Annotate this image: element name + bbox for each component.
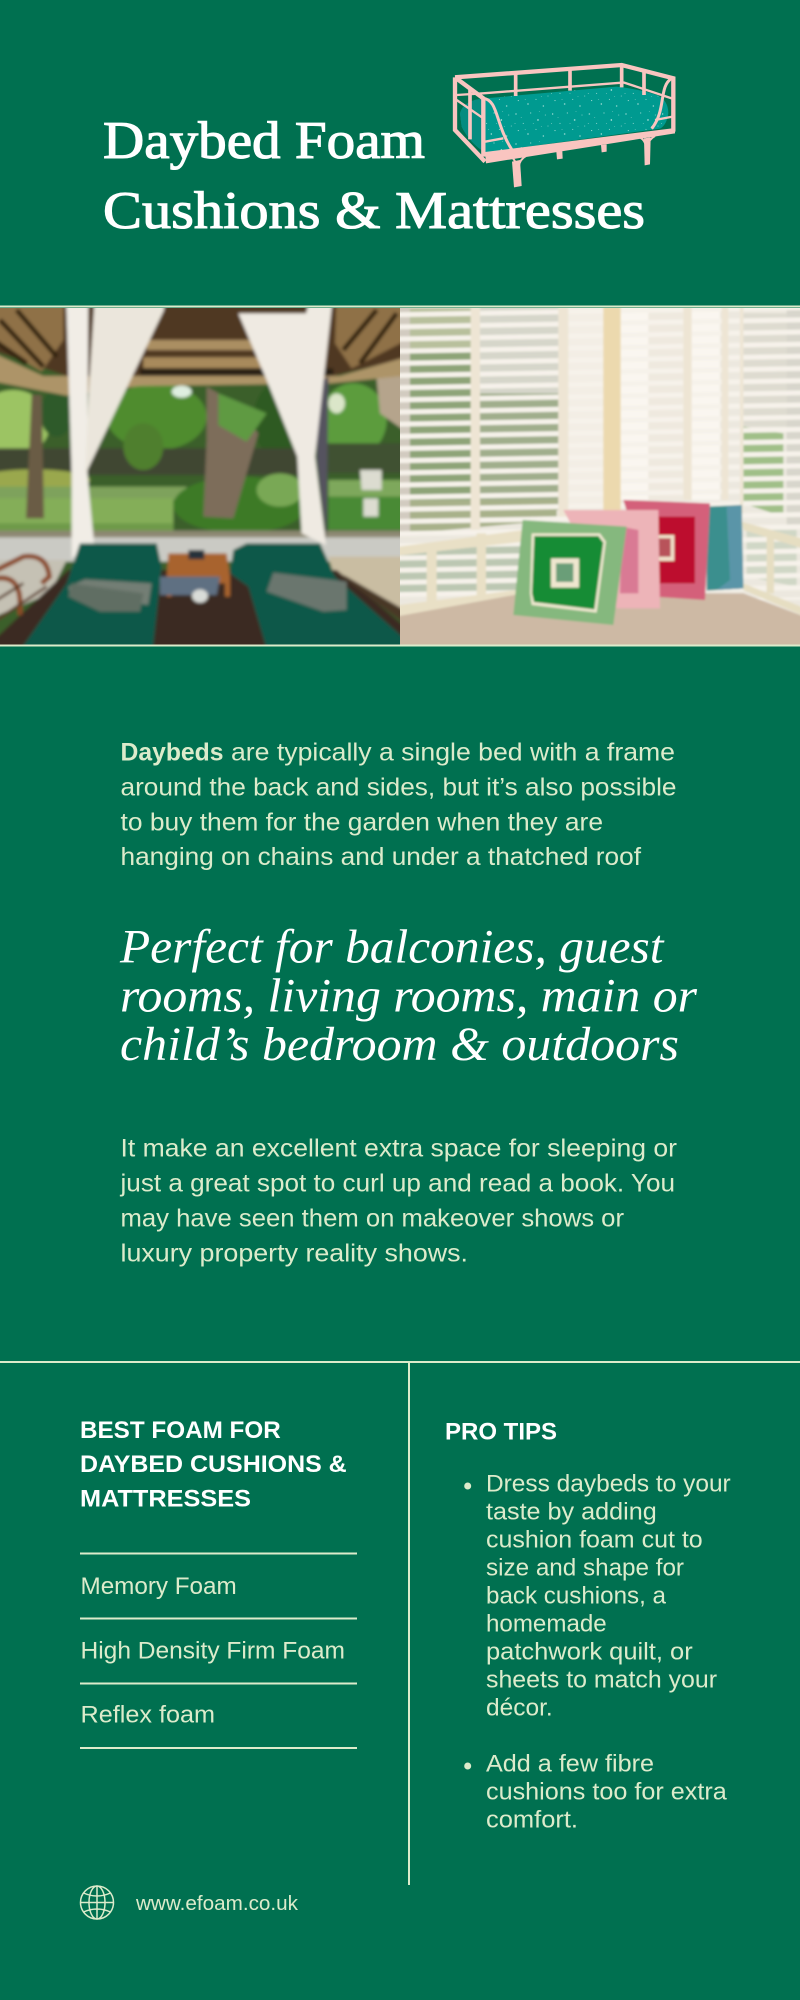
footer	[80, 1886, 299, 1919]
divider: below photos	[0, 644, 800, 646]
photo: garden daybed under thatched roof	[0, 308, 400, 644]
icon: daybed illustration	[455, 65, 675, 187]
title: Cushions & Mattresses	[103, 182, 645, 240]
teal cushion	[707, 505, 743, 591]
garden foliage	[0, 390, 50, 457]
tip 1: cushion foam cut to	[486, 1527, 703, 1554]
bench	[0, 556, 49, 620]
text block: intro: around the back and sides, but it’s also possible	[120, 773, 676, 801]
text block: intro: Daybeds	[120, 739, 224, 767]
title	[103, 112, 645, 240]
callout: perfect for: Perfect for balconies, guest	[119, 921, 665, 974]
text block: extra space: luxury property reality shows.	[120, 1240, 468, 1268]
tip 1: sheets to match your	[486, 1667, 717, 1694]
red cushion	[623, 500, 710, 600]
heading: best foam: DAYBED CUSHIONS &	[80, 1451, 347, 1478]
divider: section rule	[0, 1361, 800, 1363]
text block: intro	[120, 739, 676, 871]
text block: extra space: It make an excellent extra space for sleeping or	[120, 1135, 677, 1163]
tip 1: Dress daybeds to your	[486, 1471, 731, 1498]
foam list: High Density Firm Foam	[80, 1638, 345, 1665]
foam list: Memory Foam	[80, 1573, 237, 1600]
callout: perfect for	[119, 921, 697, 1071]
panel: pro tips	[445, 1418, 731, 1834]
panel: best foam	[80, 1417, 357, 1749]
heading: pro tips: PRO TIPS	[445, 1418, 557, 1445]
text block: intro: to buy them for the garden when they are	[120, 808, 603, 836]
table	[167, 553, 230, 583]
icon: globe	[80, 1886, 114, 1919]
text block: extra space	[119, 1135, 677, 1268]
foam list: Reflex foam	[80, 1701, 215, 1728]
callout: perfect for: child’s bedroom & outdoors	[120, 1018, 679, 1071]
heading: best foam: BEST FOAM FOR	[80, 1417, 281, 1444]
text block: extra space: just a great spot to curl up and read a book. You	[119, 1170, 675, 1198]
tip 1: décor.	[486, 1695, 553, 1722]
tip 1: homemade	[486, 1611, 607, 1638]
divider: top rule	[0, 306, 800, 308]
green cushions	[22, 541, 163, 644]
tip 2: comfort.	[486, 1807, 578, 1834]
heading: best foam	[80, 1417, 347, 1513]
roof	[0, 308, 400, 376]
tip 2: cushions too for extra	[486, 1779, 727, 1806]
divider: column rule	[408, 1362, 410, 1885]
tip 2	[464, 1751, 727, 1834]
website: www.efoam.co.uk	[135, 1893, 299, 1915]
text block: extra space: may have seen them on makeover shows or	[120, 1205, 624, 1233]
tip 1: size and shape for	[486, 1555, 684, 1582]
title: Daybed Foam	[103, 112, 425, 170]
floor	[0, 568, 400, 644]
heading: best foam: MATTRESSES	[80, 1486, 251, 1513]
callout: perfect for: rooms, living rooms, main or	[120, 970, 697, 1023]
text block: intro: hanging on chains and under a thatched roof	[120, 843, 641, 871]
tip 2: Add a few fibre	[486, 1751, 654, 1778]
tip 1	[464, 1471, 731, 1722]
grey pillows	[68, 579, 152, 605]
photo: cushions on window seat	[400, 308, 800, 644]
curtains	[66, 293, 94, 558]
tip 1: back cushions, a	[486, 1583, 667, 1610]
foam list	[80, 1552, 357, 1749]
tip 1: patchwork quilt, or	[486, 1639, 693, 1666]
green cushion	[513, 520, 627, 625]
tip 1: taste by adding	[486, 1499, 657, 1526]
pink cushion	[563, 510, 660, 608]
text block: intro: are typically a single bed with a frame	[231, 739, 675, 767]
